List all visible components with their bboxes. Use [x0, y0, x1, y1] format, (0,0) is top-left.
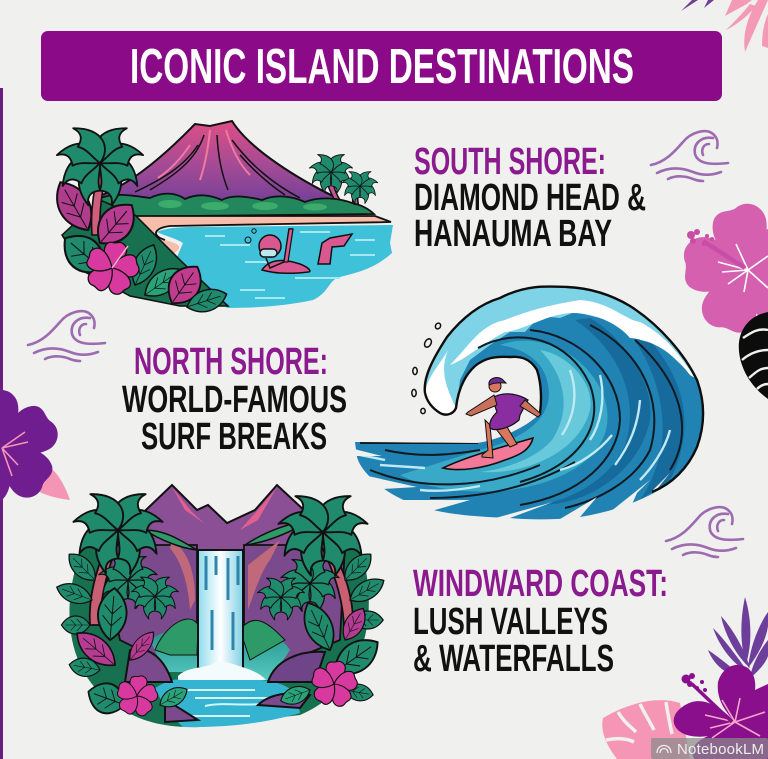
decoration: pink hibiscus right	[666, 191, 768, 353]
text: south shore	[414, 141, 646, 255]
title banner	[41, 31, 722, 101]
decoration: bottom right flora	[602, 597, 768, 759]
text: windward coast: & WATERFALLS	[413, 638, 614, 680]
volcano	[97, 121, 345, 207]
text: north shore: NORTH SHORE:	[134, 341, 328, 383]
text: south shore: DIAMOND HEAD &	[414, 177, 646, 219]
illustration: waterfall valley	[54, 484, 388, 727]
rocks	[125, 649, 172, 682]
left edge bar	[0, 88, 3, 759]
icon: wave left	[28, 311, 105, 361]
surfer	[466, 378, 541, 458]
spray drops	[412, 322, 442, 414]
text: south shore: SOUTH SHORE:	[414, 141, 606, 183]
text: south shore: HANAUMA BAY	[414, 213, 612, 255]
text: north shore: WORLD-FAMOUS	[122, 379, 347, 421]
foliage base	[69, 540, 369, 727]
foliage band	[97, 194, 374, 217]
left foliage	[47, 119, 230, 317]
illustration: surfer on breaking wave	[350, 280, 710, 525]
watermark: NotebookLM	[677, 741, 764, 758]
small palms right	[309, 150, 379, 211]
wave tail cuts	[350, 448, 670, 525]
foam	[178, 662, 266, 680]
decoration: black monstera leaf	[739, 312, 768, 399]
palm trunks	[90, 532, 122, 625]
surfboard	[443, 438, 533, 470]
cliffs	[100, 545, 197, 665]
beach	[130, 216, 391, 262]
side foliage left	[54, 548, 191, 720]
text: windward coast: LUSH VALLEYS	[413, 601, 608, 643]
lagoon	[155, 679, 300, 727]
snorkeler	[245, 229, 352, 273]
waterfall	[198, 550, 243, 668]
side foliage right	[278, 548, 388, 710]
wave body	[350, 280, 710, 525]
decoration: left purple hibiscus	[0, 366, 83, 532]
pink monstera	[602, 700, 690, 759]
purple fronds	[708, 597, 768, 680]
icon: wave bottom right	[666, 507, 743, 557]
icon: wave top right	[651, 131, 728, 181]
watermark	[651, 738, 768, 759]
mountains	[125, 485, 320, 560]
magenta hibiscus	[674, 665, 768, 759]
text: windward coast	[413, 563, 668, 680]
inner palms	[98, 550, 158, 610]
illustration: volcano lagoon with snorkeler	[47, 119, 393, 317]
text: north shore	[122, 341, 347, 458]
big palms	[72, 484, 164, 576]
text: north shore: SURF BREAKS	[141, 416, 327, 458]
pool background	[150, 625, 290, 680]
lagoon	[157, 225, 393, 308]
decoration: top right fronds	[681, 0, 768, 52]
